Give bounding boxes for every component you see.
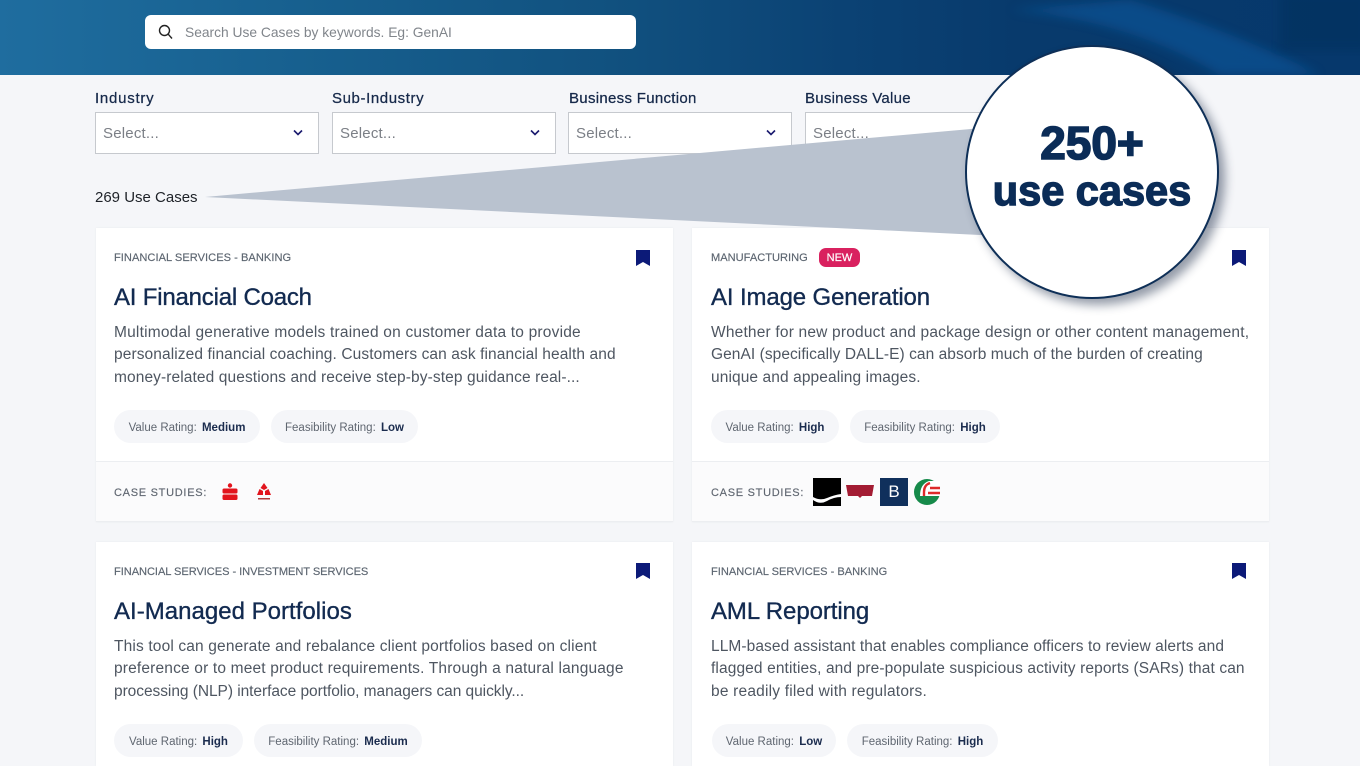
icon: search [158, 24, 172, 39]
header banner [0, 0, 1360, 75]
description [114, 638, 624, 700]
filter: business function: Select... [576, 125, 632, 142]
logo: natwest [257, 483, 271, 500]
description: preference or to meet product requirements. Through a natural language [114, 660, 624, 677]
feasibility rating [850, 410, 1000, 443]
case studies: CASE STUDIES: [711, 487, 804, 499]
filter: business value [805, 112, 1029, 154]
value rating: Value Rating: High [726, 422, 824, 434]
value rating [711, 410, 839, 443]
card: AI Financial Coach [96, 228, 673, 522]
description: personalized financial coaching. Customers can ask financial health and [114, 346, 616, 363]
icon: bookmark [636, 563, 650, 579]
logo: sparkasse [222, 483, 238, 500]
callout circle [965, 45, 1219, 299]
description [711, 324, 1249, 386]
logo: navy B: B [888, 482, 900, 501]
feasibility rating: Feasibility Rating: Medium [268, 736, 408, 748]
use case count: 269 Use Cases [95, 189, 198, 206]
filter: industry: Select... [103, 125, 159, 142]
callout text: use cases [993, 167, 1191, 214]
filter label: business value: Business Value [805, 90, 911, 107]
card title: AI Image Generation [711, 284, 930, 311]
new badge [819, 248, 860, 267]
description: money-related questions and receive step-by-step guidance real-... [114, 369, 580, 386]
description: LLM-based assistant that enables compliance officers to review alerts and [711, 638, 1224, 655]
card title: AI-Managed Portfolios [114, 598, 352, 625]
icon: bookmark [636, 250, 650, 266]
feasibility rating: Feasibility Rating: High [864, 422, 986, 434]
card: AML Reporting [692, 542, 1269, 766]
description: processing (NLP) interface portfolio, managers can quickly... [114, 683, 524, 700]
search placeholder: Search Use Cases by keywords. Eg: GenAI [185, 25, 452, 40]
filter: sub-industry: Select... [340, 125, 396, 142]
filter: sub-industry [332, 112, 556, 154]
logo: black wave [813, 478, 841, 506]
feasibility rating [271, 410, 418, 443]
value rating: Value Rating: High [129, 736, 228, 748]
value rating: Value Rating: Low [726, 736, 822, 748]
value rating [712, 724, 836, 757]
description: GenAI (specifically DALL-E) can absorb much of the burden of creating [711, 346, 1203, 363]
description: flagged entities, and pre-populate suspicious activity reports (SARs) that can [711, 660, 1245, 677]
filter label: industry: Industry [95, 90, 154, 107]
description: unique and appealing images. [711, 369, 921, 386]
new badge: NEW [827, 252, 852, 264]
feasibility rating [847, 724, 998, 757]
search box [145, 15, 636, 49]
filter label: business function: Business Function [569, 90, 697, 107]
value rating [114, 410, 260, 443]
description: This tool can generate and rebalance client portfolios based on client [114, 638, 597, 655]
value rating [114, 724, 243, 757]
description [114, 324, 616, 386]
card: AI-Managed Portfolios [96, 542, 673, 766]
filter: business value: Select... [813, 125, 869, 142]
category: FINANCIAL SERVICES - INVESTMENT SERVICES [114, 566, 368, 578]
icon: bookmark [1232, 250, 1246, 266]
filter label: sub-industry: Sub-Industry [332, 90, 424, 107]
filter: industry [95, 112, 319, 154]
card title: AI Financial Coach [114, 284, 312, 311]
logo: green and red circle [914, 479, 940, 505]
filter: business function [568, 112, 792, 154]
description: Whether for new product and package design or other content management, [711, 324, 1249, 341]
case studies: CASE STUDIES: [114, 487, 207, 499]
case studies [692, 461, 1269, 522]
callout number: 250+ [1040, 117, 1144, 169]
description: Multimodal generative models trained on customer data to provide [114, 324, 581, 341]
feasibility rating: Feasibility Rating: High [862, 736, 983, 748]
feasibility rating [254, 724, 422, 757]
card: AI Image Generation [692, 228, 1269, 522]
description [711, 638, 1245, 700]
category: FINANCIAL SERVICES - BANKING [114, 252, 291, 264]
description: be readily filed with regulators. [711, 683, 927, 700]
value rating: Value Rating: Medium [129, 422, 245, 434]
feasibility rating: Feasibility Rating: Low [285, 422, 404, 434]
category: FINANCIAL SERVICES - BANKING [711, 566, 887, 578]
case studies [96, 461, 673, 522]
logo: navy B [880, 478, 908, 506]
category: MANUFACTURING [711, 252, 808, 264]
card title: AML Reporting [711, 598, 869, 625]
logo: red batwing [846, 485, 874, 498]
icon: bookmark [1232, 563, 1246, 579]
